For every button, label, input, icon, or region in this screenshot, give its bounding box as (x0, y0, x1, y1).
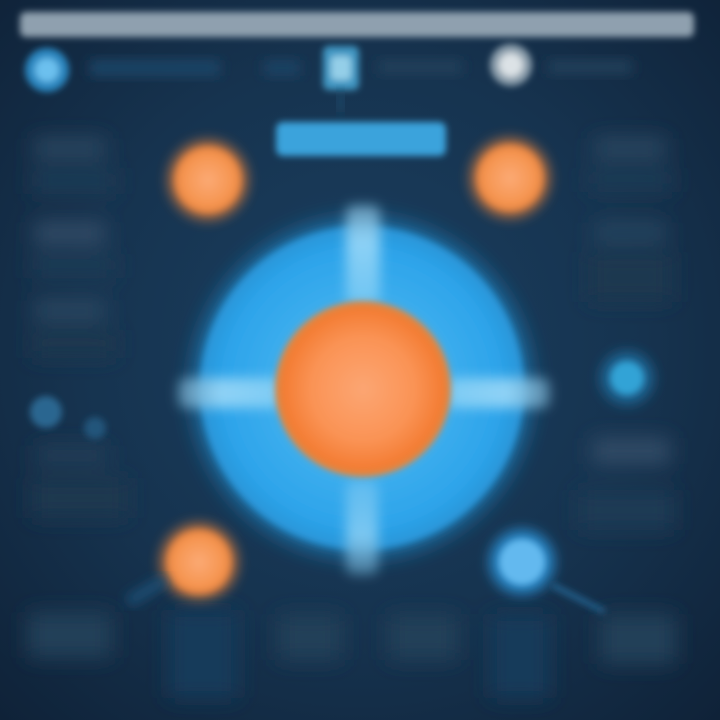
central diagram (178, 205, 550, 575)
text block: left 3 (34, 300, 106, 320)
spoke: left (178, 378, 282, 408)
ring (200, 226, 524, 550)
text block: right 3 detail (578, 490, 674, 530)
connector: bottom left (128, 580, 165, 602)
orange circle: top left (168, 140, 248, 220)
text block: left 2 detail (32, 254, 116, 278)
icon: header light-blue square (323, 46, 359, 90)
orange circle: bottom left (160, 523, 238, 601)
icon: right blue dot (600, 351, 654, 405)
caption: left header (90, 60, 220, 76)
blue circle: bottom right (489, 529, 555, 595)
text block: right 1 detail (588, 168, 672, 192)
text block: left 1 detail (32, 168, 116, 194)
title bar (20, 12, 694, 37)
banner pill (276, 122, 446, 156)
core halo (275, 301, 451, 477)
bottom text 6 (600, 614, 676, 664)
text block: left 1 (34, 138, 106, 158)
bottom row panels (28, 610, 676, 698)
text block: right 2 (594, 222, 666, 242)
caption: center-left header (264, 60, 300, 76)
spoke: top (346, 205, 380, 305)
text block: left 4 (36, 445, 108, 465)
bottom text 1 (28, 612, 112, 658)
caption: center header (378, 60, 462, 74)
left column text blocks (32, 138, 128, 518)
connector: bottom right (552, 585, 605, 612)
text block: right 1 (594, 138, 666, 158)
spoke: bottom (346, 480, 378, 575)
orange circle: top right (470, 138, 550, 218)
spoke: right (446, 378, 550, 408)
bottom text 3 (278, 614, 342, 660)
text block: left 2 (34, 222, 106, 244)
icon: header blue circle (25, 48, 69, 92)
text block: right 3 (592, 438, 670, 464)
header row: icons and captions (25, 44, 632, 92)
bottom panel 2 (168, 610, 238, 698)
text block: left 4 detail (32, 478, 128, 518)
text block: left 3 detail (32, 330, 116, 358)
glow (192, 218, 532, 558)
bottom text 4 (388, 614, 458, 660)
caption: right header (548, 60, 632, 74)
right column text blocks (578, 138, 674, 530)
bottom panel 5 (490, 614, 550, 698)
connector under header (338, 92, 343, 112)
text block: right 2 detail (588, 252, 672, 302)
icon: header white circle (490, 44, 532, 86)
core (280, 306, 446, 472)
icons: left small pair (30, 396, 106, 439)
